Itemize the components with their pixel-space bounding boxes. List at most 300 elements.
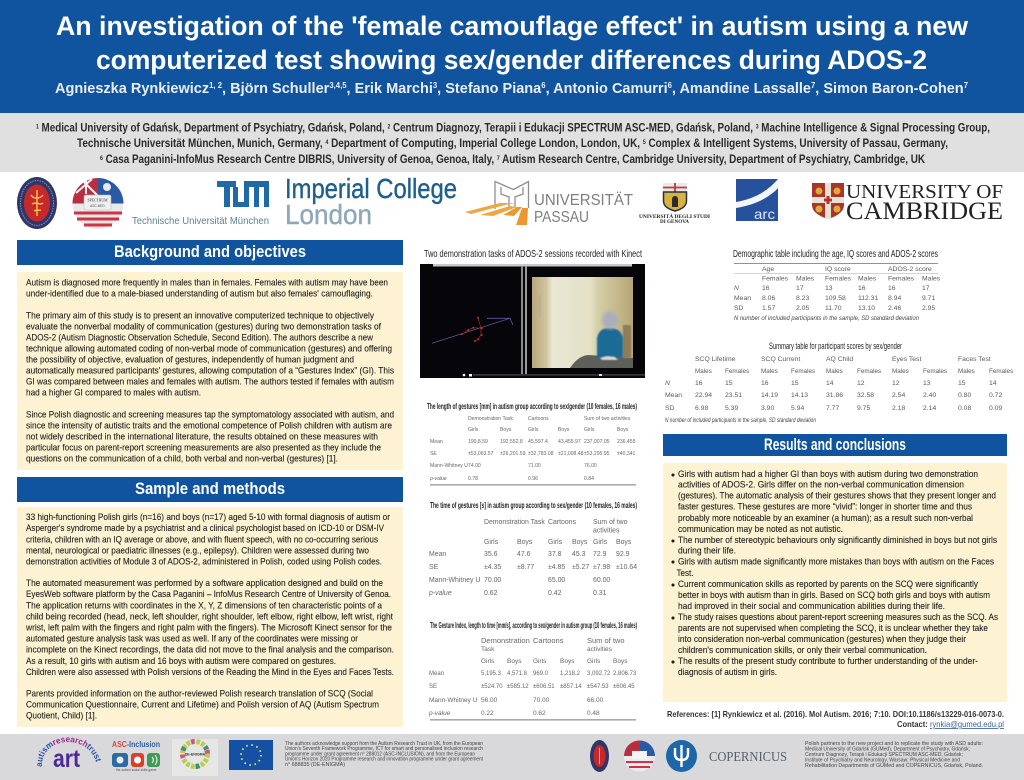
text block: results: parents are not supervised when completing the SCQ, it is unclear whether they take (678, 623, 988, 633)
table: summary scores: Males (826, 368, 843, 375)
logo: Spectrum (624, 740, 655, 772)
heading: sample and methods (17, 477, 403, 502)
table: demographics: 9.71 (922, 295, 935, 302)
table: length of gestures: 0.84 (584, 476, 594, 482)
heading: results (663, 434, 1007, 456)
text block: results: probably more noticeable by an examiner (a human); as a result such non-verbal (678, 513, 973, 523)
table: gesture index: 2,806.73 (613, 671, 637, 677)
table: length of gestures: 74.00 (468, 463, 481, 469)
figure: Kinect recordings (420, 249, 645, 378)
table: demographics: N number of included participants in the sample, SD standard deviation (734, 315, 919, 322)
table: length of gestures: ±32,783.08 (528, 451, 554, 457)
funding acknowledgement: programme under grant agreement n° 288012 (ASC-INCLUSION), and from the European (285, 752, 475, 758)
text block: background: Autism is diagnosed more frequently in males than in females. Females with autism may have been (26, 277, 388, 287)
table: demographics: Demographic table including the age, IQ scores and ADOS-2 scores (733, 249, 938, 260)
text block: sample and methods: Parents provided information on the author-reviewed Polish research translation of SCQ (Social (26, 688, 373, 698)
text block: results: faster gestures. These gestures are more “vivid”: longer in shorter time and thus (678, 502, 972, 512)
affiliations band (0, 113, 1024, 172)
table: summary scores: 2.14 (923, 405, 936, 412)
table: gesture index: ±606.51 (533, 684, 555, 690)
table: length of gestures: Demonstration Task (468, 416, 513, 422)
table: gesture index: 0.62 (533, 710, 546, 717)
authors: , Simon Baron-Cohen (815, 80, 964, 97)
authors: 1, 2 (209, 81, 223, 90)
text block: results: The results of the present study contribute to further understanding of the under- (678, 656, 978, 666)
text block: sample and methods: criteria, children with an IQ average or above, and with fluent speech, with no co-occurring serious (26, 534, 378, 544)
table: length of gestures: Girls (468, 427, 479, 433)
logo: Imperial College London: London (285, 199, 372, 230)
text: The Gesture Index, length to time [mm/s], according to sex/gender in autism group (10 females, 16 males) (430, 620, 637, 630)
table: length of gestures: 0.78 (468, 476, 478, 482)
table: time of gestures: SE (429, 564, 439, 571)
table: length of gestures: ±53,295.95 (584, 451, 610, 457)
table: length of gestures (427, 401, 637, 485)
table: gesture index: activities (587, 646, 613, 653)
table: length of gestures: Boys (558, 427, 570, 433)
text block: results: (gestures). The automatic analysis of their gestures shows that they present longer and (678, 490, 996, 500)
affiliations band: 1 (36, 124, 39, 130)
logo: University of Genoa: DI GENOVA (660, 220, 690, 225)
table: demographics: Females (888, 276, 915, 282)
title (56, 11, 969, 75)
table: time of gestures: Boys (572, 539, 588, 546)
table: time of gestures: Girls (484, 539, 499, 546)
text block: sample and methods: child being recorded (head, neck, left shoulder, right shoulder, left elbow, right elbow, left wrist, right (26, 611, 393, 621)
text block: results: activities of ADOS-2. Girls differ on the non-verbal communication dimension (678, 480, 964, 490)
table: gesture index: 56.00 (481, 697, 498, 704)
affiliations band: 5 (643, 140, 646, 146)
table: gesture index: Girls (481, 658, 495, 665)
table: summary scores: 5.94 (791, 405, 804, 412)
table: gesture index: 1,218.2 (560, 671, 581, 677)
affiliations band: Department of Computing, Imperial College London, London, UK, (328, 137, 643, 150)
affiliations band: Machine Intelligence & Signal Processing Group, (759, 122, 990, 134)
authors: , Amandine Lassalle (672, 80, 811, 97)
skeleton view (432, 317, 513, 343)
text block: background: technique allowing automated coding of non-verbal mode of communication (gestures) and offering (26, 343, 392, 353)
table: time of gestures: ±7.98 (593, 564, 610, 571)
table: summary scores: Males (958, 368, 975, 375)
table: demographics: Mean (734, 295, 751, 302)
table: time of gestures: 47.6 (517, 551, 531, 558)
table: demographics: Females (762, 276, 789, 282)
table: summary scores: 0.80 (958, 392, 971, 399)
text block: background: had a higher GI compared to males with autism. (26, 387, 201, 397)
table: demographics: 2.46 (888, 305, 901, 312)
title: computerized test showing sex/gender differences during ADOS-2 (96, 45, 927, 75)
funding acknowledgement: Union's Horizon 2020 Programme research and innovation programme under grant agreement (285, 756, 484, 762)
table: summary scores: Females (725, 368, 749, 375)
logo: Copernicus: COPERNICUS (709, 749, 787, 764)
table: gesture index: Girls (587, 658, 601, 665)
table: summary scores: 13 (923, 380, 931, 387)
authors: , Erik Marchi (347, 80, 433, 97)
text block: sample and methods: Children were also assessed with Polish versions of the Reading the Mind in the Eyes and Faces Tests. (26, 667, 394, 677)
table: time of gestures: activities (593, 528, 620, 534)
table: summary scores: N (665, 380, 670, 387)
table: gesture index: ±585.12 (507, 684, 529, 690)
table: summary scores: SD (665, 405, 675, 412)
text block: background: particular focus on parent-report screening measurements are also presented as they include the (26, 442, 381, 452)
table: length of gestures: 236,455 (617, 439, 636, 445)
table: summary scores: 9.75 (857, 405, 870, 412)
text block: sample and methods: 33 high-functioning Polish girls (n=16) and boys (n=17) aged 5-10 with formal diagnosis of autism or (26, 512, 390, 522)
table: demographics: IQ score (825, 266, 851, 273)
table: gesture index: 66.00 (587, 697, 604, 704)
table: time of gestures: 0.31 (593, 590, 607, 597)
text block: sample and methods: EyesWeb software platform by the Casa Paganini – InfoMus Research Centre of University of Genoa. (26, 589, 391, 599)
text block: results: better in boys with autism than in girls. Based on SCQ both girls and boys with autism (678, 590, 990, 600)
authors: , Björn Schuller (222, 80, 329, 97)
partners note: Rehabilitation Departments of GUMed and COPERNICUS, Gdańsk, Poland. (805, 763, 983, 769)
table: demographics: Males (796, 276, 815, 282)
panel: background and objectives (17, 240, 403, 470)
logo: DE-ENIGMA ring (172, 739, 218, 776)
funding acknowledgement: Union's Seventh Framework Programme, ICT for smart and personalised inclusion research (285, 746, 483, 752)
table: length of gestures: ±53,063.57 (468, 451, 494, 457)
table: summary scores: 2.40 (923, 392, 936, 399)
affiliations band: Medical University of Gdańsk, Department of Psychiatry, Gdańsk, Poland, (39, 122, 387, 134)
table: summary scores: 2.18 (892, 405, 905, 412)
table: summary scores: 15 (791, 380, 799, 387)
text block: sample and methods: The automated measurement was performed by a software application designed and build on the (26, 578, 383, 588)
text block: background: The primary aim of this study is to present an innovative computerized technique to objectively (26, 310, 374, 320)
authors: 6 (668, 81, 672, 90)
logo: Imperial College London: Imperial College (285, 173, 457, 204)
table: gesture index: 0.48 (587, 710, 600, 717)
table: gesture index: Sum of two (587, 636, 625, 645)
table: summary scores: 0.72 (989, 392, 1002, 399)
table: time of gestures: Boys (616, 539, 632, 546)
table: summary scores: 15 (958, 380, 966, 387)
partners note: Institute of Psychiatry and Neurology, Warsaw; Physical Medicine and (805, 758, 960, 764)
table: summary scores: AQ Child (826, 356, 853, 363)
text block: sample and methods: Quotient, Child) [1]. (26, 710, 97, 720)
table: demographics: 2.95 (922, 305, 935, 312)
table: time of gestures: ±5.27 (572, 564, 589, 571)
table: demographics: 13.10 (858, 305, 875, 312)
table: time of gestures: 70.00 (484, 577, 501, 584)
table: length of gestures: Boys (617, 427, 629, 433)
logo: ASC-Inclusion: ASC-Inclusion (112, 739, 160, 749)
logo: ASC-Inclusion (112, 739, 160, 772)
text block: sample and methods (17, 507, 403, 727)
affiliations band: Technische Universität München, Munich, Germany, (77, 137, 363, 150)
table: summary scores: 15 (725, 380, 733, 387)
text block: results (663, 463, 1007, 702)
authors: 7 (811, 81, 816, 90)
funding acknowledgement (285, 741, 484, 768)
logo: arc (736, 179, 778, 222)
table: gesture index: Mann-Whitney U (429, 697, 478, 704)
table: summary scores: 14 (989, 380, 997, 387)
table: time of gestures: Girls (593, 539, 608, 546)
logo: Imperial College London (285, 173, 457, 230)
header banner (0, 0, 1024, 113)
table: time of gestures: 0.42 (548, 590, 562, 597)
table: gesture index: 70.00 (533, 697, 550, 704)
table: length of gestures: p-value (429, 476, 447, 482)
caption: Kinect figure: Two demonstration tasks of ADOS-2 sessions recorded with Kinect (424, 249, 642, 260)
text block: background: GI was compared between males and females with autism. The authors tested if females with autism (26, 376, 394, 386)
table: demographics: 17 (796, 285, 804, 292)
table: length of gestures: 190,8.59 (468, 439, 488, 445)
table: summary scores: 16 (695, 380, 703, 387)
table: time of gestures: 92.9 (616, 551, 630, 558)
table: time of gestures: Girls (548, 539, 563, 546)
logo: Medical University of Gdansk crest (17, 177, 57, 229)
table: gesture index: 4,571.8 (507, 671, 528, 677)
table: gesture index: 5,195.3 (481, 671, 502, 677)
video frame (420, 264, 645, 378)
table: summary scores: 16 (761, 380, 769, 387)
table: gesture index: ±857.14 (560, 684, 582, 690)
text block: sample and methods: The application returns with coordinates in the X, Y, Z dimensions of ten characteristic points of a (26, 600, 383, 610)
text block: results: during their life. (678, 546, 736, 556)
logo: University of Cambridge (812, 181, 1003, 225)
authors: , Antonio Camurri (546, 80, 668, 97)
table: summary scores: 7.77 (826, 405, 839, 412)
table: summary scores: Males (695, 368, 712, 375)
partners note: Centrum Diagnozy, Terapii i Edukacji SPECTRUM ASC-MED, Gdańsk; (805, 752, 963, 758)
affiliations band: Complex & Intelligent Systems, University of Passau, Germany, (646, 137, 948, 150)
text block: results: The number of stereotypic behaviours only significantly diminished in boys but not girls (678, 535, 997, 545)
table: summary scores: Males (761, 368, 778, 375)
authors: 6 (541, 81, 546, 90)
table: summary scores: 14.19 (761, 392, 778, 399)
references and contact: Contact: rynkia@gumed.edu.pl (897, 719, 1004, 729)
table: time of gestures (428, 500, 637, 597)
table: time of gestures: 37.8 (548, 551, 562, 558)
heading: results: Results and conclusions (764, 436, 906, 454)
table: length of gestures: Girls (584, 427, 595, 433)
table: demographics: Males (858, 276, 877, 282)
table: gesture index (428, 620, 637, 720)
authors: Agnieszka Rynkiewicz (55, 80, 214, 97)
logo: TUM (132, 181, 269, 227)
partners note: Polish partners to the new project and to replicate the study with ASD adults: (805, 741, 983, 747)
photo: child, blurred (532, 277, 633, 368)
text block: sample and methods: As a result, 10 girls with autism and 16 boys with autism were compared on gestures. (26, 656, 336, 666)
table: length of gestures: 237,007.05 (584, 439, 610, 445)
table: demographics: 112.31 (858, 295, 879, 302)
logo: Spectrum ASC-MED: ASC-MED (90, 204, 106, 208)
affiliations band: 7 (497, 156, 500, 162)
table: summary scores: 14.13 (791, 392, 808, 399)
text block: sample and methods: demonstration activities of Module 3 of ADOS-2, administered in Polish, coded using Polish codes. (26, 557, 382, 567)
logo: Autism Research Trust art: autismresearchtrust (37, 737, 101, 767)
text block: background: ADOS-2 (Autism Diagnostic Observation Schedule, Second Edition). The authors describe a new (26, 332, 373, 342)
text block: background: evaluate the nonverbal modality of communication (gestures) during two demonstration tasks of (26, 321, 381, 331)
table: time of gestures: 45.3 (572, 551, 586, 558)
table: length of gestures: Sum of two activities (584, 416, 631, 422)
table: length of gestures: ±21,008.48 (558, 451, 584, 457)
table: demographics: SD (734, 305, 744, 312)
affiliations band: 6 (100, 156, 103, 162)
table: summary scores: 5.39 (725, 405, 738, 412)
text block: results: Current communication skills as reported by parents on the SCQ were significantly (678, 579, 978, 589)
logo: University of Cambridge: CAMBRIDGE (846, 198, 1003, 225)
table: demographics: 1.57 (762, 305, 775, 312)
title: An investigation of the 'female camouflage effect' in autism using a new (56, 11, 969, 41)
table: time of gestures: ±4.35 (484, 564, 501, 571)
table: summary scores: 3.90 (761, 405, 774, 412)
text block: sample and methods: incomplete on the Kinect recordings, the data did not move to the final analysis and the comparison. (26, 645, 394, 655)
table: summary scores: 6.98 (695, 405, 708, 412)
table: summary scores: Mean (665, 392, 682, 399)
table: demographics: 16 (888, 285, 896, 292)
text block: sample and methods: automated gesture analysis task was used as well. If any of the coordinates were missing or (26, 634, 358, 644)
table: summary scores: 22.94 (695, 392, 712, 399)
table: summary scores: 12 (857, 380, 865, 387)
table: demographics (733, 249, 941, 322)
table: time of gestures: Cartoons (548, 519, 577, 526)
table: demographics: 16 (858, 285, 866, 292)
table: demographics: 17 (922, 285, 930, 292)
table: gesture index: 3,092.72 (587, 671, 611, 677)
table: gesture index: ±547.53 (587, 684, 609, 690)
table: length of gestures: 192,552.8 (500, 439, 523, 445)
table: length of gestures: 71.00 (528, 463, 541, 469)
logo: University of Genoa (639, 183, 710, 225)
table: summary scores: 23.51 (725, 392, 742, 399)
table: summary scores: Summary table for participant scores by sex/gender (769, 341, 902, 351)
partners note (805, 741, 983, 769)
text block: background: under-identified due to a male-biased understanding of autism but also females' camouflaging. (26, 288, 373, 298)
table: time of gestures: 0.62 (484, 590, 498, 597)
table: time of gestures: Boys (517, 539, 533, 546)
table: demographics: Males (922, 276, 941, 282)
table: time of gestures: Mann-Whitney U (429, 577, 480, 584)
table: summary scores: 14 (826, 380, 834, 387)
text block: sample and methods: Asperger's syndrome made by a psychiatrist and a clinical psychologist based on ICD-10 or DSM-IV (26, 523, 385, 533)
table: summary scores: 2.54 (892, 392, 905, 399)
text block: background: not widely described in the international literature, the results obtained on these measures with (26, 431, 378, 441)
table: length of gestures: Mann-Whitney U (430, 463, 468, 469)
footer band (0, 734, 1024, 780)
table: summary scores: 31.86 (826, 392, 843, 399)
table: time of gestures: 65.00 (548, 577, 565, 584)
text block: results: Test. (676, 568, 694, 578)
table: gesture index: Cartoons (533, 636, 564, 645)
affiliations band: 4 (325, 140, 329, 146)
heading: background (17, 240, 403, 265)
table: summary scores: 32.58 (857, 392, 874, 399)
affiliations band: Autism Research Centre, Cambridge University, Department of Psychiatry, Cambridge, UK (500, 153, 926, 166)
table: time of gestures: Mean (429, 551, 446, 558)
table: time of gestures: p-value (428, 590, 452, 597)
table: summary scores: 0.09 (989, 405, 1002, 412)
panel: sample and methods (17, 477, 403, 727)
funding acknowledgement: The authors acknowledge support from the Autism Research Trust in UK, from the European (285, 741, 483, 747)
affiliations band: Casa Paganini-InfoMus Research Centre DIBRIS, University of Genoa, Genoa, Italy, (103, 153, 497, 166)
text block: results: Girls with autism made significantly more mistakes than boys with autism on the Faces (678, 556, 994, 566)
table: time of gestures: ±4.85 (548, 564, 565, 571)
table: summary scores: Females (989, 368, 1013, 375)
affiliations band: 2 (387, 124, 391, 130)
table: demographics: N (734, 285, 739, 292)
table: gesture index: 969.0 (533, 671, 549, 677)
table: length of gestures: ±26,201.59 (500, 451, 526, 457)
table: gesture index: SE (429, 684, 437, 690)
text block: background: questions on the communication of a child, both verbal and non-verbal (gestures) [1]. (26, 453, 338, 463)
text block: background (17, 272, 403, 470)
logo: ASC-Inclusion: the autism social skills game (116, 768, 157, 772)
table: gesture index: ±606.45 (613, 684, 635, 690)
table: length of gestures: Cartoons (528, 416, 549, 422)
text block: background: Since Polish diagnostic and screening measures tap the symptomatology associated with autism, and (26, 409, 394, 419)
table: length of gestures: SE (430, 451, 437, 457)
table: gesture index: Boys (560, 658, 575, 665)
table: length of gestures: Mean (430, 439, 443, 445)
table: demographics: 8.94 (888, 295, 901, 302)
table: gesture index: p-value (428, 710, 451, 717)
authors: 7 (964, 81, 969, 90)
funding acknowledgement: n° 688835 (DE-ENIGMA) (285, 762, 345, 768)
table: length of gestures: Boys (500, 427, 512, 433)
references and contact (667, 709, 1004, 729)
table: demographics: 8.06 (762, 295, 775, 302)
logo: Spectrum ASC-MED: SPECTRUM (87, 198, 108, 202)
logo: University of Cambridge: UNIVERSITY OF (846, 181, 1003, 203)
table: length of gestures: ±40,341 (617, 451, 636, 457)
table: length of gestures: Girls (528, 427, 539, 433)
table: summary scores: SCQ Lifetime (695, 356, 736, 363)
text block: sample and methods: wrist, left palm with the fingers and right palm with the fingers). The Microsoft Kinect sensor for the (25, 622, 392, 632)
table: summary scores: 0.08 (958, 405, 971, 412)
table: time of gestures: 60.00 (593, 577, 610, 584)
partners note: Medical University of Gdańsk (GUMed), Department of Psychiatry, Gdańsk; (805, 746, 970, 752)
table: summary scores: Females (857, 368, 881, 375)
table: demographics: 11.70 (825, 305, 842, 312)
table: time of gestures: 72.9 (593, 551, 607, 558)
table: length of gestures: 76.00 (584, 463, 597, 469)
text block: results: Girls with autism had a higher GI than boys with autism during two demonstration (678, 469, 978, 479)
logo: blue oval (666, 740, 697, 772)
table: time of gestures: 35.6 (484, 551, 498, 558)
text block: results: diagnosis of autism in girls. (678, 667, 777, 677)
table: length of gestures: 45,597.4 (528, 439, 548, 445)
logo: Spectrum ASC-MED (72, 178, 124, 229)
text block: results: into consideration non-verbal communication (gestures) when they judge their (678, 634, 966, 644)
text block: results: children's communication skills, or only their verbal communication. (678, 645, 927, 655)
heading: sample and methods: Sample and methods (135, 480, 285, 498)
table: demographics: Age (762, 266, 774, 273)
table: gesture index: Boys (507, 658, 522, 665)
table: gesture index: Task (481, 646, 495, 653)
text block: background: automatically measured participants' gestures, allowing computation of a “Gestures Index” (GI). This (26, 365, 394, 375)
table: gesture index: Mean (429, 671, 444, 677)
logo: TUM: Technische Universität München (132, 216, 269, 227)
table: demographics: 2.05 (796, 305, 809, 312)
heading: background: Background and objectives (114, 243, 306, 261)
table: summary scores: Females (923, 368, 947, 375)
logo: University of Passau: UNIVERSITÄT (534, 192, 634, 209)
table: length of gestures: The length of gestures [mm] in autism group according to sex/gender (10 females, 16 males) (427, 401, 637, 411)
authors: 3 (433, 81, 438, 90)
text block: sample and methods: mental, neurological or paediatric illnesses (e.g., epilepsy). Children were assessed during two (26, 545, 369, 555)
table: gesture index: Girls (533, 658, 547, 665)
text block: results: communication may be noted as not autistic. (678, 524, 843, 534)
table: time of gestures: The time of gestures [s] in autism group according to sex/gender (10 females, 16 males) (430, 500, 637, 510)
table: summary scores: SCQ Current (761, 356, 800, 363)
table: gesture index: Boys (613, 658, 628, 665)
table: gesture index: 0.22 (481, 710, 494, 717)
table: summary scores: Females (791, 368, 815, 375)
table: summary scores: 12 (892, 380, 900, 387)
text block: sample and methods: Communication Questionnaire, Current and Lifetime) and Polish version of AQ (Autism Spectrum (26, 699, 379, 709)
table: length of gestures: 43,455.97 (558, 439, 581, 445)
